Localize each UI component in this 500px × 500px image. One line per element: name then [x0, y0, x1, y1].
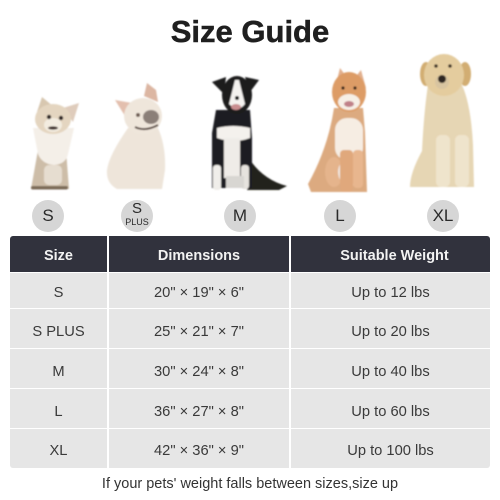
row M size: M — [52, 364, 65, 380]
row M weight: Up to 40 lbs — [351, 364, 430, 380]
icon: french bulldog — [107, 83, 165, 189]
row L dimensions — [109, 389, 289, 428]
row S size: S — [54, 284, 63, 300]
table header: Dimensions — [109, 236, 289, 272]
row S PLUS dimensions: 25" × 21" × 7" — [154, 324, 244, 340]
table header: Size — [10, 236, 107, 272]
size badge: XL — [427, 200, 459, 232]
table header: Suitable Weight: Suitable Weight — [340, 248, 449, 264]
row XL size: XL — [50, 443, 67, 459]
size badge: S PLUS: PLUS — [125, 217, 149, 227]
row S PLUS size: S PLUS — [32, 324, 85, 340]
title: Size Guide — [171, 14, 329, 49]
row XL dimensions — [109, 429, 289, 468]
row L weight: Up to 60 lbs — [351, 404, 430, 420]
icon: golden retriever — [410, 54, 474, 187]
table header: Size: Size — [44, 248, 73, 264]
size badge: S: S — [42, 206, 54, 225]
size badge: M: M — [233, 206, 247, 225]
icon: shiba inu — [308, 68, 367, 192]
icon: chihuahua — [31, 97, 79, 190]
row XL size — [10, 429, 107, 468]
row M weight — [291, 349, 490, 388]
table header: Dimensions: Dimensions — [158, 248, 240, 264]
row L weight — [291, 389, 490, 428]
row S PLUS size — [10, 309, 107, 348]
row S dimensions: 20" × 19" × 6" — [154, 284, 244, 300]
row S PLUS dimensions — [109, 309, 289, 348]
row S weight — [291, 273, 490, 308]
size badge: L: L — [335, 206, 345, 225]
size badge: S PLUS — [121, 200, 153, 232]
table header: Suitable Weight — [291, 236, 490, 272]
size table — [10, 236, 490, 468]
row S dimensions — [109, 273, 289, 308]
size badge: S — [32, 200, 64, 232]
size badge: S PLUS: S — [132, 200, 142, 217]
row L size: L — [54, 404, 63, 420]
size badge: M — [224, 200, 256, 232]
row L dimensions: 36" × 27" × 8" — [154, 404, 244, 420]
row S PLUS weight: Up to 20 lbs — [351, 324, 430, 340]
row M size — [10, 349, 107, 388]
row S size — [10, 273, 107, 308]
row S weight: Up to 12 lbs — [351, 284, 430, 300]
size badge: XL: XL — [433, 206, 453, 225]
row M dimensions — [109, 349, 289, 388]
footnote: If your pets' weight falls between sizes,size up — [102, 476, 398, 492]
row XL dimensions: 42" × 36" × 9" — [154, 443, 244, 459]
row M dimensions: 30" × 24" × 8" — [154, 364, 244, 380]
row L size — [10, 389, 107, 428]
row XL weight — [291, 429, 490, 468]
row XL weight: Up to 100 lbs — [347, 443, 434, 459]
dog illustrations — [30, 53, 475, 193]
row S PLUS weight — [291, 309, 490, 348]
icon: border collie — [212, 76, 287, 190]
size badge: L — [324, 200, 356, 232]
